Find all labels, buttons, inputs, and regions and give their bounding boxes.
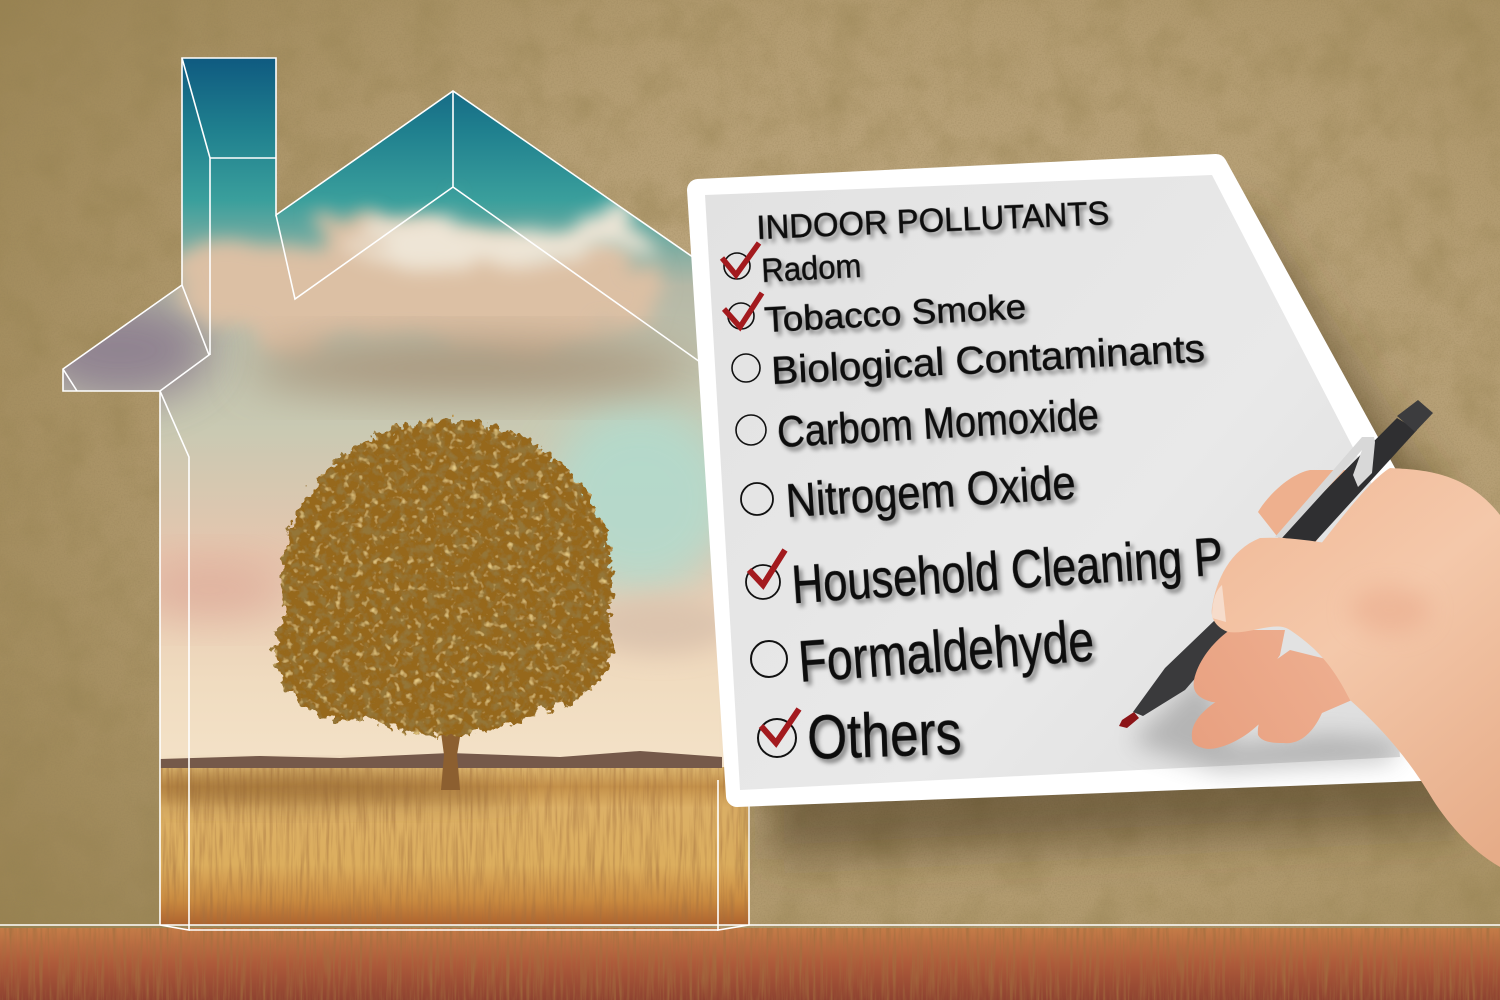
house outline <box>63 58 749 930</box>
knuckle shading <box>1350 586 1430 634</box>
ground lines <box>0 925 1500 930</box>
title: INDOOR POLLUTANTS <box>756 194 1110 246</box>
tree trunk <box>441 734 460 790</box>
paper grey surface <box>705 175 1400 790</box>
item: Carbon Monoxide: Carbom Momoxide <box>776 390 1100 457</box>
pen <box>1119 400 1433 728</box>
ground brush near tree <box>160 772 530 806</box>
item: Tobacco Smoke: Tobacco Smoke <box>763 287 1027 340</box>
bottom strip: red wheat field <box>0 928 1500 1000</box>
pen barrel upper <box>1279 418 1417 544</box>
field <box>160 767 748 924</box>
item: Others <box>758 699 962 773</box>
third finger <box>1258 660 1352 743</box>
tree <box>275 420 613 790</box>
pen silver clip <box>1275 437 1375 538</box>
item: Household Cleaning Products <box>746 526 1225 615</box>
checklist paper <box>698 165 1420 796</box>
hand front <box>1192 520 1500 867</box>
tree canopy <box>275 420 613 736</box>
pen tip <box>1119 712 1139 728</box>
horizon treeline <box>160 751 722 768</box>
hand back behind pen <box>1320 468 1500 640</box>
item: Others: Others <box>806 699 962 773</box>
second finger <box>1192 650 1330 749</box>
pen and hand shadow <box>1130 670 1400 772</box>
first finger <box>1194 630 1285 702</box>
checklist paper shadow <box>760 215 1470 860</box>
index finger behind pen <box>1258 470 1350 550</box>
sky <box>60 58 760 770</box>
item: Radon <box>722 243 862 289</box>
item: Formaldehyde: Formaldehyde <box>796 608 1096 695</box>
item: Biological Contaminants: Biological Contaminants <box>770 327 1206 393</box>
pen end cap <box>1397 400 1433 432</box>
paper sheet border <box>698 165 1420 796</box>
house filled with landscape photo <box>30 58 760 927</box>
clouds and sky tints <box>30 212 735 653</box>
thumb and palm <box>1212 520 1500 867</box>
item: Nitrogen Oxide: Nitrogem Oxide <box>784 455 1077 527</box>
item: Household Cleaning Products: Household Cleaning P <box>790 526 1225 615</box>
item: Formaldehyde <box>751 608 1096 695</box>
thumbnail <box>1212 585 1226 622</box>
item: Radon: Radom <box>760 247 862 289</box>
pen barrel lower <box>1133 620 1232 716</box>
